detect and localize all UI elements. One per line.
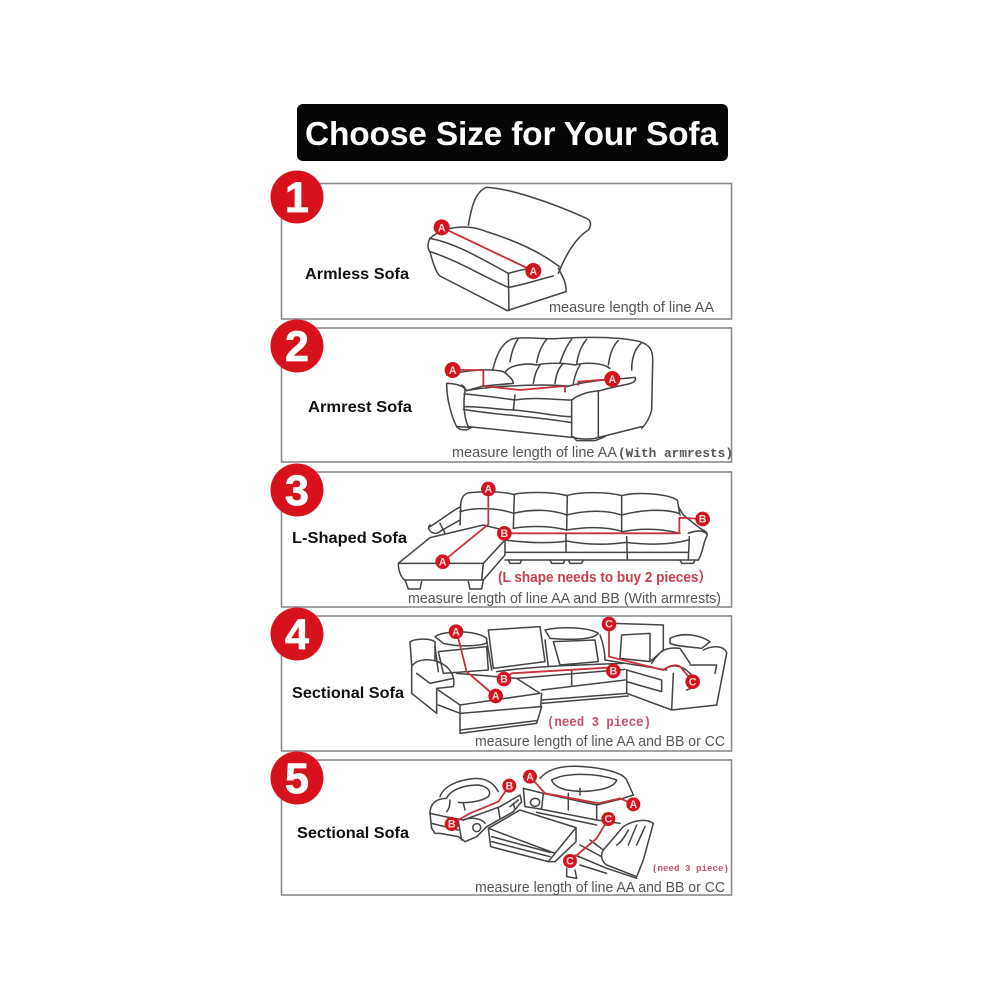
measure note: measure length of line AA and BB or CC bbox=[475, 734, 725, 750]
marker A end bbox=[525, 263, 541, 279]
marker A left bbox=[523, 770, 537, 784]
sofa sketch: three-piece set bbox=[430, 766, 653, 878]
marker C bottom bbox=[563, 854, 577, 868]
marker A top bbox=[449, 624, 463, 639]
measure note: measure length of line AA bbox=[549, 300, 714, 316]
marker C bottom: C bbox=[689, 676, 697, 688]
marker B right bbox=[695, 512, 710, 526]
badge 4: 4 bbox=[285, 611, 309, 659]
marker A top: A bbox=[484, 484, 492, 496]
panel: sectional sofa 1 bbox=[282, 616, 732, 751]
marker B bottom bbox=[445, 817, 459, 831]
panel: sectional sofa 2 bbox=[282, 760, 732, 896]
marker C bottom: C bbox=[566, 856, 574, 868]
marker B right bbox=[606, 664, 621, 678]
marker B bottom: B bbox=[448, 819, 456, 831]
marker B right: B bbox=[609, 666, 617, 678]
badge 5 bbox=[270, 752, 324, 804]
marker C top: C bbox=[604, 814, 612, 826]
label: armless sofa: Armless Sofa bbox=[305, 266, 409, 283]
marker B left: B bbox=[500, 674, 508, 686]
measure note: measure length of line AA and BB or CC bbox=[475, 880, 725, 896]
marker A top bbox=[481, 482, 496, 496]
sofa sketch: L-shaped bbox=[398, 482, 710, 589]
panel: L-shaped sofa bbox=[282, 472, 732, 607]
panel: armrest sofa bbox=[282, 328, 733, 462]
measure note: (With armrests) bbox=[618, 446, 733, 461]
marker B left bbox=[497, 526, 512, 541]
marker A: A bbox=[438, 222, 446, 234]
marker A bottom bbox=[435, 554, 450, 569]
title banner bbox=[297, 104, 728, 161]
badge 3: 3 bbox=[285, 467, 309, 515]
marker B top: B bbox=[505, 780, 513, 792]
marker A right: A bbox=[608, 374, 616, 386]
sofa sketch: armless bbox=[428, 187, 591, 311]
badge 4 bbox=[270, 608, 324, 660]
measure note: measure length of line AA bbox=[452, 445, 617, 461]
marker A end: A bbox=[529, 266, 537, 278]
marker B left: B bbox=[500, 528, 508, 540]
marker C top bbox=[602, 617, 616, 631]
marker A left: A bbox=[449, 365, 457, 377]
marker A bottom: A bbox=[492, 691, 500, 703]
marker A right: A bbox=[629, 799, 637, 811]
badge 2: 2 bbox=[285, 323, 309, 371]
label: L-shaped sofa: L-Shaped Sofa bbox=[292, 530, 407, 547]
red note: (need 3 piece) bbox=[547, 715, 651, 731]
marker A top: A bbox=[452, 626, 460, 638]
badge 1: 1 bbox=[285, 174, 309, 222]
label: sectional sofa: Sectional Sofa bbox=[292, 685, 404, 702]
marker A right bbox=[626, 797, 640, 811]
marker A left bbox=[445, 362, 461, 378]
marker A bottom: A bbox=[439, 556, 447, 568]
marker C top: C bbox=[605, 619, 613, 631]
sofa sketch: sectional bbox=[410, 617, 727, 733]
badge 2 bbox=[270, 320, 324, 372]
marker A left: A bbox=[526, 771, 534, 783]
marker C top bbox=[601, 812, 615, 826]
label: armrest sofa: Armrest Sofa bbox=[308, 399, 412, 416]
badge 1 bbox=[270, 170, 324, 224]
badge 5: 5 bbox=[285, 755, 309, 803]
sofa sketch: armrest bbox=[445, 337, 653, 441]
measure note bbox=[452, 445, 733, 461]
marker A bbox=[434, 219, 450, 235]
panel: armless sofa bbox=[282, 184, 732, 319]
measure note: measure length of line AA and BB (With armrests) bbox=[408, 591, 721, 607]
title banner: Choose Size for Your Sofa bbox=[305, 116, 718, 153]
marker B left bbox=[497, 672, 511, 686]
label: sectional sofa: Sectional Sofa bbox=[297, 825, 409, 842]
marker B top bbox=[502, 779, 516, 793]
marker A right bbox=[604, 371, 620, 387]
red note: (L shape needs to buy 2 pieces） bbox=[498, 569, 712, 586]
marker C bottom bbox=[685, 674, 700, 689]
red note: (need 3 piece) bbox=[652, 863, 729, 874]
badge 3 bbox=[270, 464, 324, 516]
marker B right: B bbox=[699, 514, 707, 526]
marker A bottom bbox=[488, 689, 503, 703]
